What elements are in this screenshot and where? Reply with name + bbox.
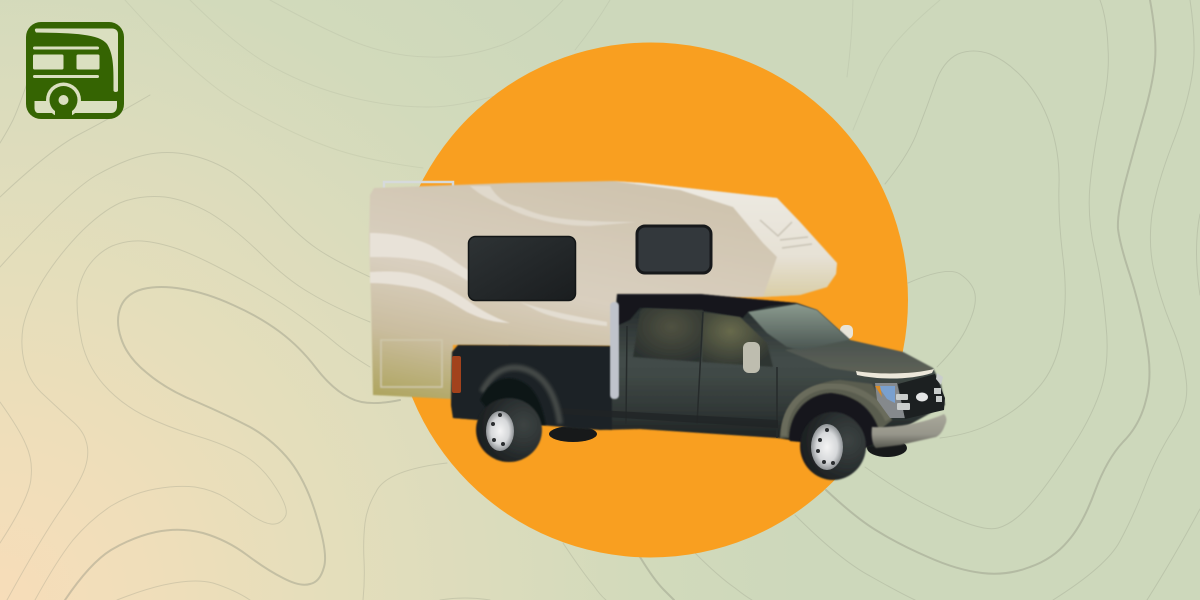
camper side window — [468, 236, 576, 300]
under-body axle and far wheel — [549, 426, 597, 442]
chrome cab trim — [610, 302, 619, 399]
truck camper — [369, 181, 946, 480]
roof rack — [384, 182, 453, 188]
camper cab-over nose — [613, 181, 837, 297]
tail light — [452, 356, 461, 393]
front fender — [780, 380, 892, 438]
rear wheel arch — [482, 368, 560, 424]
front bumper — [872, 414, 946, 448]
headlight and grille — [856, 369, 945, 419]
far mirror — [840, 325, 853, 339]
hood — [785, 340, 933, 376]
roof shadow — [617, 294, 797, 326]
truck body — [451, 294, 945, 447]
cab front door window — [702, 312, 773, 367]
orange circle — [393, 42, 908, 558]
pickup bed — [451, 345, 612, 430]
front wheel well — [789, 393, 882, 448]
side mirror — [743, 342, 760, 373]
camper front window — [637, 226, 711, 273]
windshield — [748, 304, 850, 350]
camper decorative stripes — [370, 233, 468, 281]
nose vent marks — [760, 220, 812, 248]
door seams — [626, 312, 777, 438]
front wheel arch — [784, 386, 888, 436]
storage hatch — [381, 340, 442, 387]
rear wheel well — [480, 378, 546, 425]
front wheel — [800, 412, 866, 480]
icon: camper trailer badge — [26, 22, 124, 119]
cab rear door window — [633, 308, 703, 362]
camper shell — [369, 181, 837, 399]
rear wheel — [476, 398, 542, 462]
rocker panel — [560, 408, 778, 428]
